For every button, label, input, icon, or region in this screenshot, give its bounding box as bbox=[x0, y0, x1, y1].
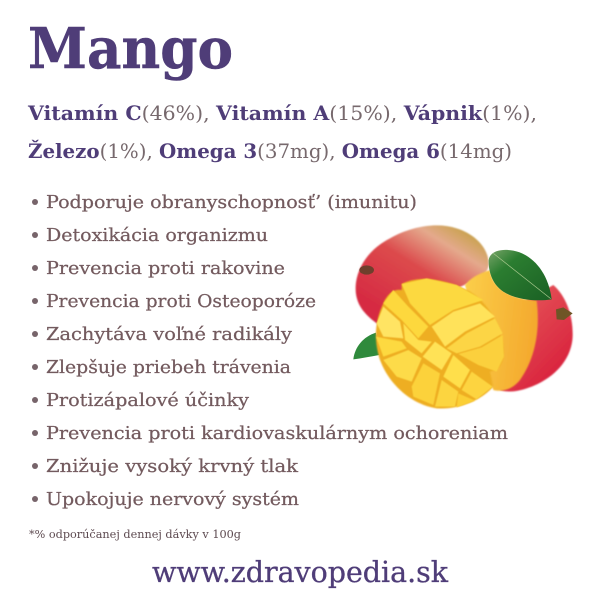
nutrient line 2: Železo(1%), Omega 3(37mg), Omega 6(14mg) bbox=[28, 139, 512, 163]
title: Mango bbox=[28, 16, 233, 82]
benefit 5: Zachytáva voľné radikály bbox=[46, 324, 293, 345]
benefits list bbox=[32, 192, 508, 510]
benefit 1: Podporuje obranyschopnosť’ (imunitu) bbox=[46, 192, 417, 213]
right red mango bbox=[500, 285, 573, 392]
footnote: *% odporúčanej dennej dávky v 100g bbox=[29, 527, 242, 541]
benefit 9: Znižuje vysoký krvný tlak bbox=[46, 456, 299, 477]
benefit 7: Protizápalové účinky bbox=[46, 390, 250, 411]
benefit 3: Prevencia proti rakovine bbox=[46, 258, 285, 279]
benefit 4: Prevencia proti Osteoporóze bbox=[46, 291, 316, 312]
cubed mango flesh base bbox=[376, 279, 504, 409]
mango stem left bbox=[359, 265, 374, 275]
small leaf bbox=[353, 333, 379, 359]
cut slice bbox=[465, 270, 538, 391]
nutrient list bbox=[27, 101, 537, 163]
website url: www.zdravopedia.sk bbox=[152, 555, 448, 589]
benefit 6: Zlepšuje priebeh trávenia bbox=[46, 357, 291, 378]
bullet dots bbox=[32, 199, 38, 502]
nutrient line 1: Vitamín C(46%), Vitamín A(15%), Vápnik(1%), bbox=[27, 101, 537, 125]
mango cubes bbox=[376, 278, 504, 407]
green leaf bbox=[489, 250, 552, 300]
benefit 10: Upokojuje nervový systém bbox=[46, 489, 299, 510]
back mango bbox=[356, 225, 489, 323]
benefit 8: Prevencia proti kardiovaskulárnym ochoreniam bbox=[46, 423, 508, 444]
mango stem right bbox=[556, 307, 573, 320]
illustration: mango fruits bbox=[353, 225, 573, 409]
leaf vein bbox=[493, 253, 551, 299]
benefit 2: Detoxikácia organizmu bbox=[46, 225, 268, 246]
